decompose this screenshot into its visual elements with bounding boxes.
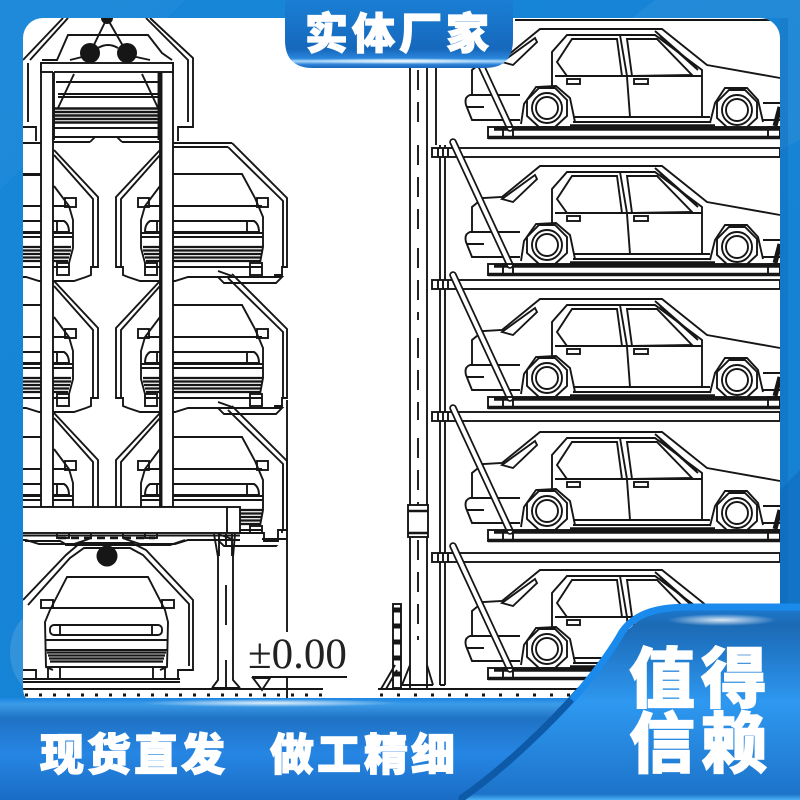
- ground line left: [23, 682, 325, 695]
- top arch with pulleys: [23, 12, 193, 175]
- lower car with arch: [23, 543, 193, 679]
- badge: 实体厂家: [285, 0, 513, 68]
- main frame columns: [41, 63, 173, 507]
- car row 5: [449, 542, 706, 680]
- car row 1: [464, 28, 780, 140]
- car row 2: [453, 142, 780, 275]
- drawing: floor beams: [432, 148, 780, 562]
- car cells: [0, 143, 287, 546]
- dimension: ±0.00: ±0.00: [248, 631, 347, 678]
- text: 做工精细: 做工精细: [270, 731, 458, 780]
- beam and post: [10, 400, 290, 688]
- text: 信赖: 信赖: [629, 707, 773, 781]
- drawing: side elevation column: [378, 68, 590, 695]
- corner panel: 值得信赖: [462, 605, 800, 800]
- car row 3: [453, 275, 780, 408]
- badge: 实体厂家: 实体厂家: [305, 10, 493, 59]
- bottom banner: [0, 698, 800, 800]
- car row 4: [453, 408, 780, 541]
- drawing: stacked side-view cars: [453, 5, 780, 679]
- column joint: [408, 505, 428, 537]
- text: 现货直发: 现货直发: [40, 731, 228, 780]
- ground line right: [378, 689, 590, 695]
- ladder post: [381, 604, 401, 689]
- text: 值得: 值得: [629, 642, 773, 716]
- dimension: ±0.00: [248, 530, 347, 698]
- drawing: tower parking front elevation: [0, 12, 347, 698]
